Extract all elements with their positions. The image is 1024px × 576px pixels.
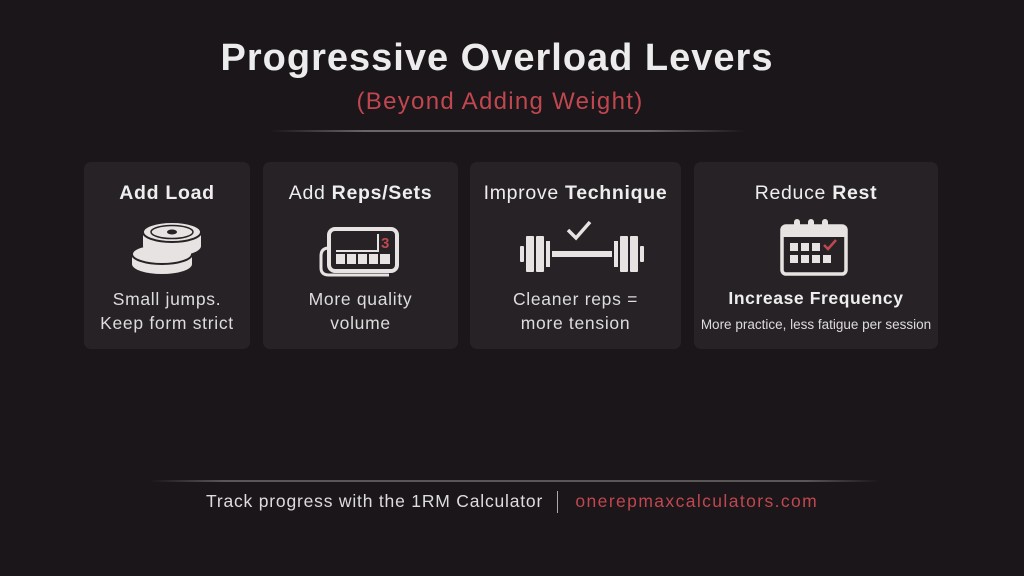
title: Progressive Overload Levers bbox=[221, 37, 773, 79]
icon: scoreboard bbox=[320, 227, 399, 276]
heading: reduce rest: Reduce Rest bbox=[755, 182, 877, 204]
text: add reps: More quality bbox=[309, 289, 412, 309]
panel: add load bbox=[84, 162, 250, 349]
text: frequency detail: More practice, less fatigue per session bbox=[701, 317, 931, 332]
text: add load bbox=[100, 289, 234, 333]
footer: Track progress with the 1RM Calculator onerepmaxcalculators.com bbox=[206, 491, 818, 511]
icon: barbell with check bbox=[520, 220, 644, 272]
text: technique: Cleaner reps = bbox=[513, 289, 638, 309]
text: add load: Keep form strict bbox=[100, 313, 234, 333]
text: technique: more tension bbox=[521, 313, 630, 333]
icon: scoreboard: 3 bbox=[381, 235, 389, 252]
text: add reps bbox=[309, 289, 412, 333]
text: technique bbox=[513, 289, 638, 333]
panel: add reps/sets bbox=[263, 162, 458, 349]
heading: add load: Add Load bbox=[119, 182, 215, 204]
text: add load: Small jumps. bbox=[113, 289, 221, 309]
icon: calendar bbox=[780, 219, 848, 276]
subtitle: (Beyond Adding Weight) bbox=[356, 88, 644, 115]
text: add reps: volume bbox=[330, 313, 391, 333]
heading: add reps: Add Reps/Sets bbox=[289, 182, 432, 204]
panel: reduce rest bbox=[694, 162, 938, 349]
icon: weight plates bbox=[132, 223, 201, 274]
text: frequency: Increase Frequency bbox=[728, 288, 904, 308]
panel: improve technique bbox=[470, 162, 681, 349]
heading: technique: Improve Technique bbox=[484, 182, 667, 204]
